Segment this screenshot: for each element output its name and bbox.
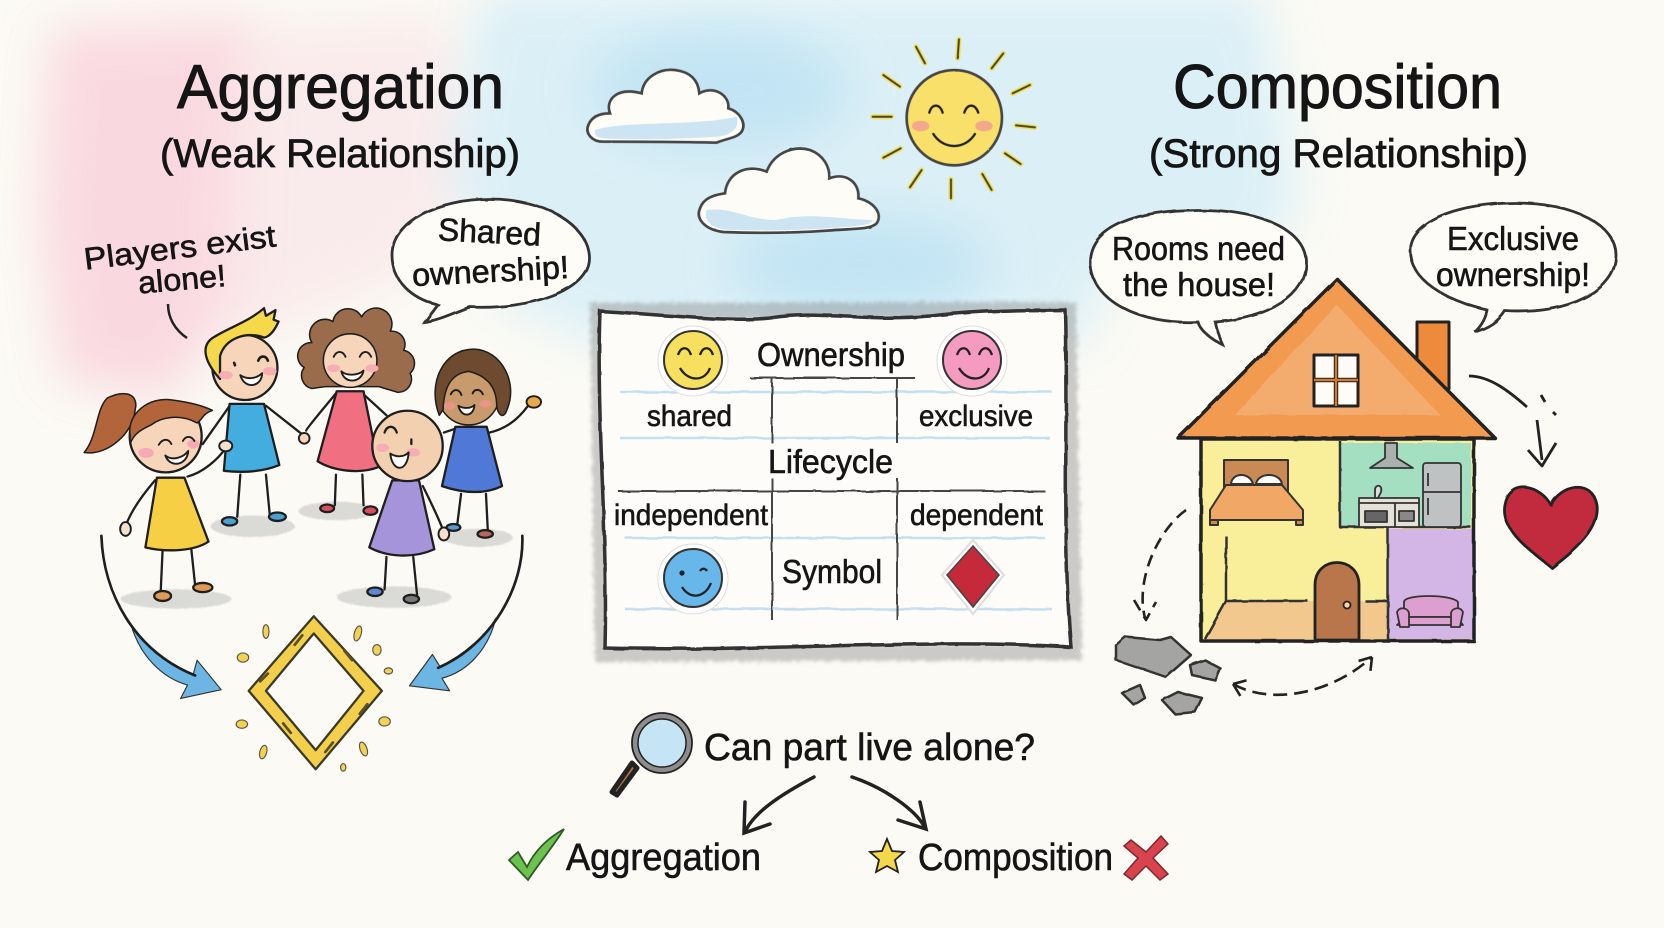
- answer: Composition: Composition: [918, 837, 1113, 879]
- icon: upper cloud: [587, 70, 743, 143]
- character: ponytail girl: [84, 394, 232, 601]
- callout: Shared ownership bubble: Shared: [437, 211, 542, 253]
- attic window: [1314, 355, 1358, 406]
- arrow: left player to diamond: [101, 536, 221, 698]
- icon: yellow star: [870, 839, 904, 872]
- icon: pink smiley: [937, 326, 1007, 396]
- label: independent: independent: [614, 499, 769, 532]
- callout: Rooms need the house bubble: the house!: [1123, 266, 1275, 303]
- icon: magnifying glass: [612, 713, 692, 795]
- bed: [1210, 460, 1303, 525]
- icon: red heart: [1504, 487, 1597, 568]
- panel: decision question: [509, 713, 1168, 880]
- ground shadows: [121, 502, 513, 609]
- kitchen appliances: [1359, 443, 1461, 527]
- label: exclusive: exclusive: [919, 400, 1033, 433]
- arrow: roof to heart: [1469, 376, 1556, 466]
- icon: hollow aggregation diamond: [236, 616, 393, 771]
- house body and rooms: [1201, 439, 1474, 641]
- title: Aggregation: (Weak Relationship): [160, 132, 520, 176]
- icon: smiling sun: [873, 39, 1035, 198]
- callout: Rooms need the house bubble: Rooms need: [1112, 230, 1285, 267]
- icon: filled red diamond: [942, 540, 1004, 614]
- panel: aggregation players group: [84, 308, 541, 771]
- title: Composition: (Strong Relationship): [1149, 132, 1528, 176]
- table grid lines: [618, 378, 1052, 620]
- row label: Lifecycle: Lifecycle: [768, 443, 893, 480]
- icon: rubble: [1116, 637, 1220, 714]
- callout: Exclusive ownership bubble: ownership!: [1436, 256, 1590, 293]
- callout: Shared ownership bubble: ownership!: [411, 249, 570, 293]
- icon: blue smiley: [658, 544, 728, 614]
- panel: comparison table: [598, 310, 1074, 654]
- row label: Symbol: Symbol: [782, 553, 882, 590]
- character: blond boy: [203, 308, 310, 526]
- table paper: [598, 310, 1074, 654]
- arrow: to aggregation: [744, 777, 814, 833]
- arrow: dashed rubble to house: [1233, 657, 1372, 697]
- callout: Exclusive ownership bubble: [1410, 203, 1616, 332]
- sky: clouds and sun: [587, 39, 1035, 233]
- title: Aggregation: Aggregation: [177, 53, 504, 122]
- callout: Exclusive ownership bubble: Exclusive: [1447, 220, 1579, 257]
- arrow: dashed to rubble: [1134, 510, 1186, 620]
- callout: Shared ownership bubble: [392, 199, 589, 322]
- panel: composition house: [1116, 279, 1597, 714]
- character: waving dark-haired child: [435, 349, 541, 538]
- title: Aggregation: [160, 53, 520, 176]
- title: Composition: Composition: [1173, 53, 1502, 122]
- label: dependent: dependent: [910, 499, 1044, 532]
- label: shared: shared: [647, 400, 732, 433]
- door: [1315, 562, 1359, 640]
- icon: yellow smiley: [658, 326, 728, 396]
- sofa: [1397, 596, 1463, 627]
- arrow: right player to diamond: [409, 536, 522, 691]
- callout: Rooms need the house bubble: [1090, 210, 1306, 345]
- row label: Ownership: Ownership: [757, 336, 905, 373]
- icon: green check mark: [509, 829, 564, 880]
- answer: Aggregation: Aggregation: [566, 837, 761, 879]
- question text: Can part live alone?: [704, 727, 1035, 769]
- icon: red cross: [1124, 836, 1168, 880]
- character: curly-haired girl: [298, 308, 414, 515]
- title: Composition: [1149, 53, 1528, 176]
- arrow: to composition: [852, 777, 926, 829]
- roof: [1178, 279, 1495, 438]
- callout: Players exist alone: [82, 218, 278, 338]
- chimney: [1417, 322, 1449, 389]
- callout: Players exist alone: alone!: [137, 258, 227, 301]
- icon: lower cloud: [699, 149, 879, 233]
- character: bald child in purple: [367, 411, 449, 603]
- callout: Players exist alone: Players exist: [82, 218, 278, 277]
